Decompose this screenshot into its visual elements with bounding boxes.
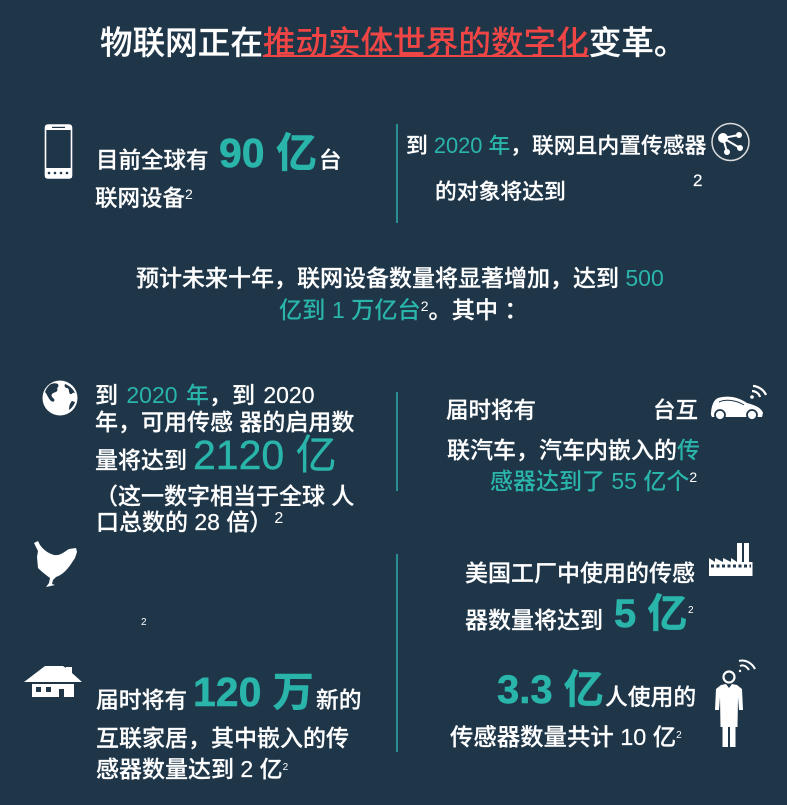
stat: devices unit: 台	[319, 148, 342, 173]
icon: globe	[42, 380, 78, 416]
stat: homes lead-in: 届时将有	[96, 687, 187, 713]
icon: smartphone	[44, 124, 72, 179]
icon: connected car	[711, 384, 767, 420]
footnote marker: 2	[141, 617, 147, 628]
icon: house	[24, 666, 82, 697]
stat: homes new: 新的	[316, 687, 362, 713]
big number: 90 亿: 90 亿	[219, 130, 317, 176]
stat: sensors line 1: 到 2020 年，到 2020	[95, 382, 315, 408]
stat: people wearing sensors: 人使用的	[605, 684, 696, 710]
stat: sensors line 4: （这一数字相当于全球 人	[95, 483, 354, 509]
stat: devices second line: 联网设备2	[95, 186, 193, 211]
stat: sensors line 2: 年，可用传感 器的启用数	[95, 409, 354, 435]
stat: homes line 3: 感器数量达到 2 亿2	[96, 756, 288, 782]
stat: 5.5 billion sensors: 感器达到了 55 亿个2	[490, 468, 697, 494]
icon: factory	[709, 543, 752, 576]
forecast text line two: 亿到 1 万亿台2。其中 ：	[279, 297, 528, 323]
stat: US factories line 2: 器数量将达到	[465, 607, 603, 633]
stat: connected cars line 1 end: 台互	[653, 398, 698, 423]
stat: connected cars line 1: 届时将有	[446, 398, 536, 423]
stat: homes line 2: 互联家居，其中嵌入的传	[96, 725, 349, 751]
big number: 3.3 亿: 3.3 亿	[497, 668, 604, 712]
footnote marker: 2	[693, 171, 702, 190]
stat: US factories line 1: 美国工厂中使用的传感	[465, 560, 695, 586]
big number: 2120 亿: 2120 亿	[193, 432, 337, 478]
big number: 120 万: 120 万	[193, 669, 314, 715]
big number: 5 亿: 5 亿	[614, 592, 687, 636]
forecast text: 预计未来十年，联网设备数量将显著增加，达到 500	[136, 265, 664, 291]
stat: sensors line 5: 口总数的 28 倍）2	[96, 509, 283, 535]
stat: connected objects 2020: 到 2020 年，联网且内置传感器	[406, 133, 706, 158]
stat: sensors line 3 lead-in: 量将达到	[95, 447, 187, 473]
stat: 1 billion wearables: 传感器数量共计 10 亿2	[450, 724, 682, 750]
stat: connected cars line 2: 联汽车，汽车内嵌入的传	[447, 437, 700, 463]
icon: network	[711, 122, 750, 162]
stat: global devices lead-in: 目前全球有	[96, 148, 209, 173]
footnote marker: 2	[688, 605, 694, 616]
title: 物联网正在推动实体世界的数字化变革。	[100, 24, 686, 61]
stat: connected objects second line: 的对象将达到	[435, 179, 566, 204]
icon: person with signal	[715, 660, 756, 747]
